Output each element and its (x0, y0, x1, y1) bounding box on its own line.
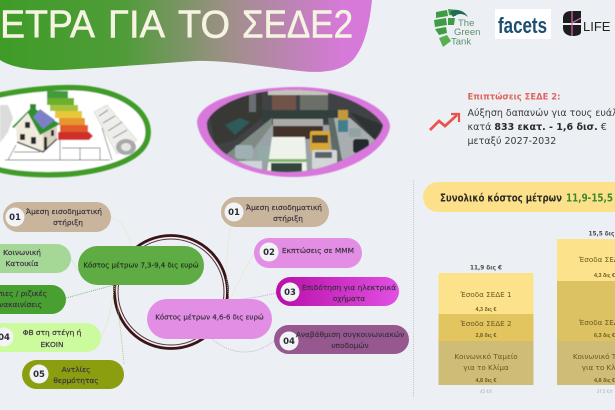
left item 02 (0, 244, 71, 273)
left item 05 (22, 360, 124, 389)
left item 05: 05 (33, 370, 45, 380)
central node: 4,6-6 bn (147, 299, 272, 339)
title banner: ΤΟ (178, 4, 230, 46)
stacked bar: 11,9 bn: 45 €/t (480, 389, 492, 394)
central node: 7,3-9,4 bn: Κόστος μέτρων 7,3-9,4 δις ευρώ (83, 262, 199, 270)
left item 01: στήριξη (53, 218, 83, 227)
stacked bar: 15,5 bn: 4,3 δις € (594, 273, 615, 279)
left item 05: Αντλίες (62, 365, 90, 374)
central node: 4,6-6 bn: Κόστος μέτρων 4,6-6 δις ευρώ (155, 314, 264, 322)
divider (412, 180, 414, 397)
impacts text block (468, 92, 615, 147)
right item 01: 01 (228, 208, 240, 218)
stacked bar: 11,9 bn: Έσοδα ΣΕΔΕ 2 (459, 319, 512, 328)
right item 02 (254, 238, 362, 268)
left item 02: Κοινωνική (3, 248, 41, 257)
title banner: ΣΕΔΕ2 (242, 4, 353, 46)
right item 01: στήριξη (273, 214, 303, 223)
stacked bar: 11,9 bn: για το Κλίμα (463, 363, 509, 372)
right item 04: υποδομών (331, 341, 369, 350)
right item 04: 04 (283, 337, 295, 347)
title banner: ΓΙΑ (108, 4, 165, 46)
right item 02: 02 (263, 248, 275, 258)
connectors (66, 217, 276, 364)
left item 02: Κατοικία (6, 259, 39, 268)
total cost heading: Συνολικό κόστος μέτρων (440, 192, 562, 204)
right item 03: Επιδότηση για ηλεκτρικά (302, 283, 396, 292)
stacked bar: 15,5 bn: 37,5 €/t (597, 389, 613, 394)
right item 04: Αναβάθμιση συγκοινωνιακών (296, 330, 404, 339)
stacked bar: 11,9 bn: Έσοδα ΣΕΔΕ 1 (459, 290, 512, 299)
stacked bar: 11,9 bn: 11,9 δις € (470, 264, 502, 272)
left item 04 (0, 323, 101, 352)
left item 01 (3, 202, 111, 232)
stacked bar: 15,5 bn (557, 230, 615, 394)
logo: facets (495, 9, 551, 39)
stacked bar: 11,9 bn: 2,8 δις € (475, 333, 497, 339)
logo: The Green Tank (434, 9, 480, 48)
icon: rising arrow (430, 114, 459, 130)
central node: 7,3-9,4 bn (78, 246, 204, 285)
left item 01: Άμεση εισοδηματική (26, 207, 102, 216)
stacked bar: 11,9 bn: 4,3 δις € (475, 307, 497, 313)
total cost heading (423, 182, 615, 212)
right item 04 (274, 325, 409, 354)
left item 03 (0, 285, 66, 314)
right item 03 (276, 277, 399, 306)
logo: The Green Tank: The (458, 18, 474, 29)
logo: The Green Tank: Green (454, 27, 480, 38)
left item 05: θερμότητας (53, 376, 99, 385)
right item 03: οχήματα (333, 294, 365, 303)
photo: city traffic (197, 85, 390, 180)
stacked bar: 15,5 bn: 4,8 δις € (594, 378, 615, 384)
stacked bar: 11,9 bn: Κοινωνικό Ταμείο (454, 352, 518, 361)
logo: facets: facets (498, 13, 547, 38)
right item 01 (221, 197, 329, 227)
photo: energy efficient house (0, 88, 148, 175)
stacked bar: 11,9 bn (438, 264, 534, 394)
right item 03: 03 (284, 288, 296, 298)
impacts text block: Επιπτώσεις ΣΕΔΕ 2: (468, 92, 560, 102)
right item 01: Άμεση εισοδηματική (246, 203, 322, 212)
left item 01: 01 (9, 213, 21, 223)
impacts text block: κατά 833 εκατ. - 1,6 δισ. € (468, 122, 607, 133)
stacked bar: 11,9 bn: 4,8 δις € (475, 378, 497, 384)
left item 04: ΦΒ στη στέγη ή (23, 328, 82, 337)
stacked bar: 15,5 bn: 6,3 δις € (594, 333, 615, 339)
central ring (114, 236, 228, 348)
logo: LIFE (563, 11, 615, 36)
left item 04: ΕΚΟΙΝ (40, 340, 64, 349)
impacts text block: μεταξύ 2027-2032 (468, 136, 556, 147)
right item 02: Εκπτώσεις σε ΜΜΜ (282, 246, 354, 255)
logo: The Green Tank: Tank (451, 36, 471, 48)
title banner (0, 0, 372, 72)
